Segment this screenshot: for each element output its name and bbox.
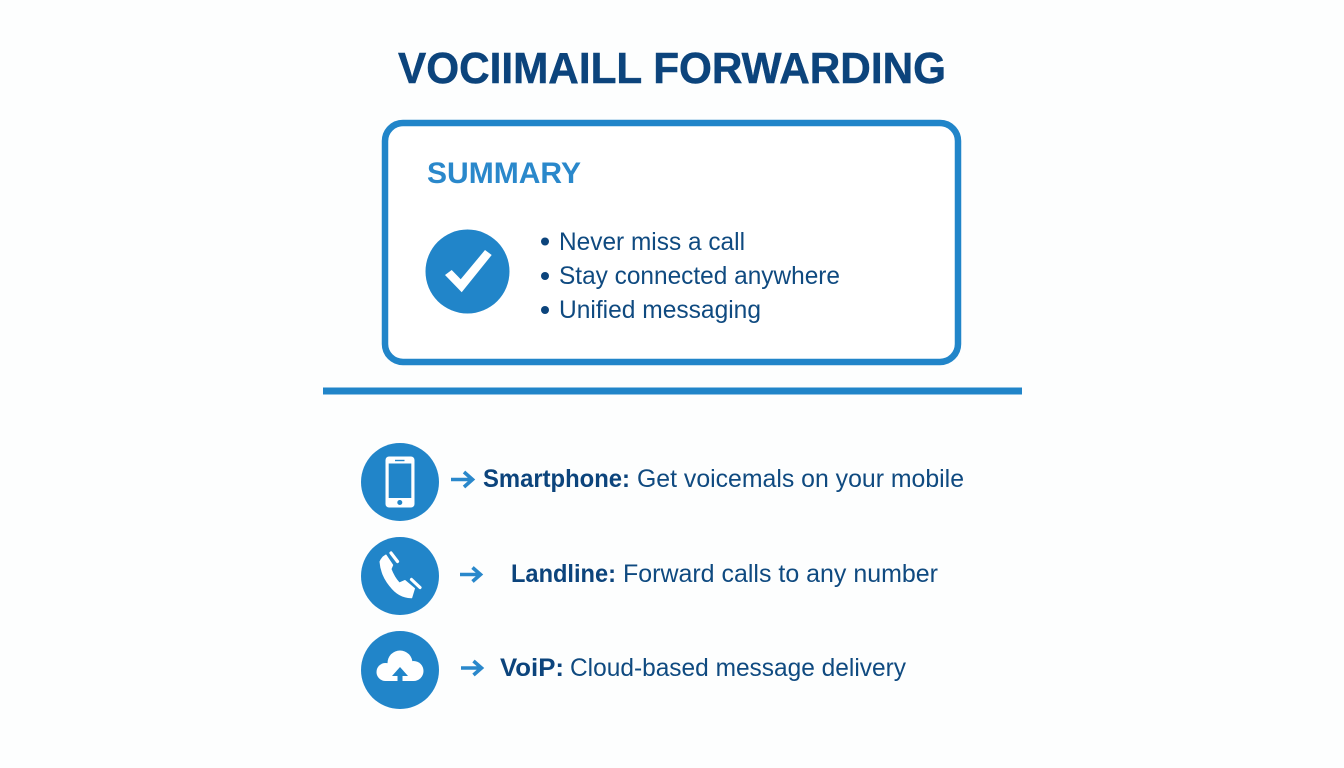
bullet: unified messaging: Unified messaging xyxy=(559,296,761,324)
panel border xyxy=(385,123,958,362)
icon: cloud upload xyxy=(361,631,439,709)
divider rule xyxy=(323,388,1022,394)
row: voip xyxy=(361,631,906,709)
arrow xyxy=(461,661,482,675)
icon: telephone handset xyxy=(361,537,439,615)
icon: check mark xyxy=(426,230,510,314)
arrow xyxy=(451,472,472,487)
icon: smartphone xyxy=(361,443,439,521)
bullet: stay connected anywhere: Stay connected anywhere xyxy=(559,262,840,290)
bullet: never miss a call: Never miss a call xyxy=(559,228,745,256)
label: landline: Landline: xyxy=(511,560,616,588)
bullet list xyxy=(541,228,840,324)
label: voip: VoiP: xyxy=(500,654,564,682)
description: smartphone: Get voicemals on your mobile xyxy=(637,465,964,493)
description: landline: Forward calls to any number xyxy=(623,560,938,588)
row: landline xyxy=(361,537,938,615)
title: VOCIIMAILL FORWARDING xyxy=(398,44,946,93)
description: voip: Cloud-based message delivery xyxy=(570,654,906,682)
panel: summary xyxy=(385,123,958,362)
heading: summary: SUMMARY xyxy=(427,157,581,190)
label: smartphone: Smartphone: xyxy=(483,465,630,493)
arrow xyxy=(460,568,480,582)
row: smartphone xyxy=(361,443,964,521)
